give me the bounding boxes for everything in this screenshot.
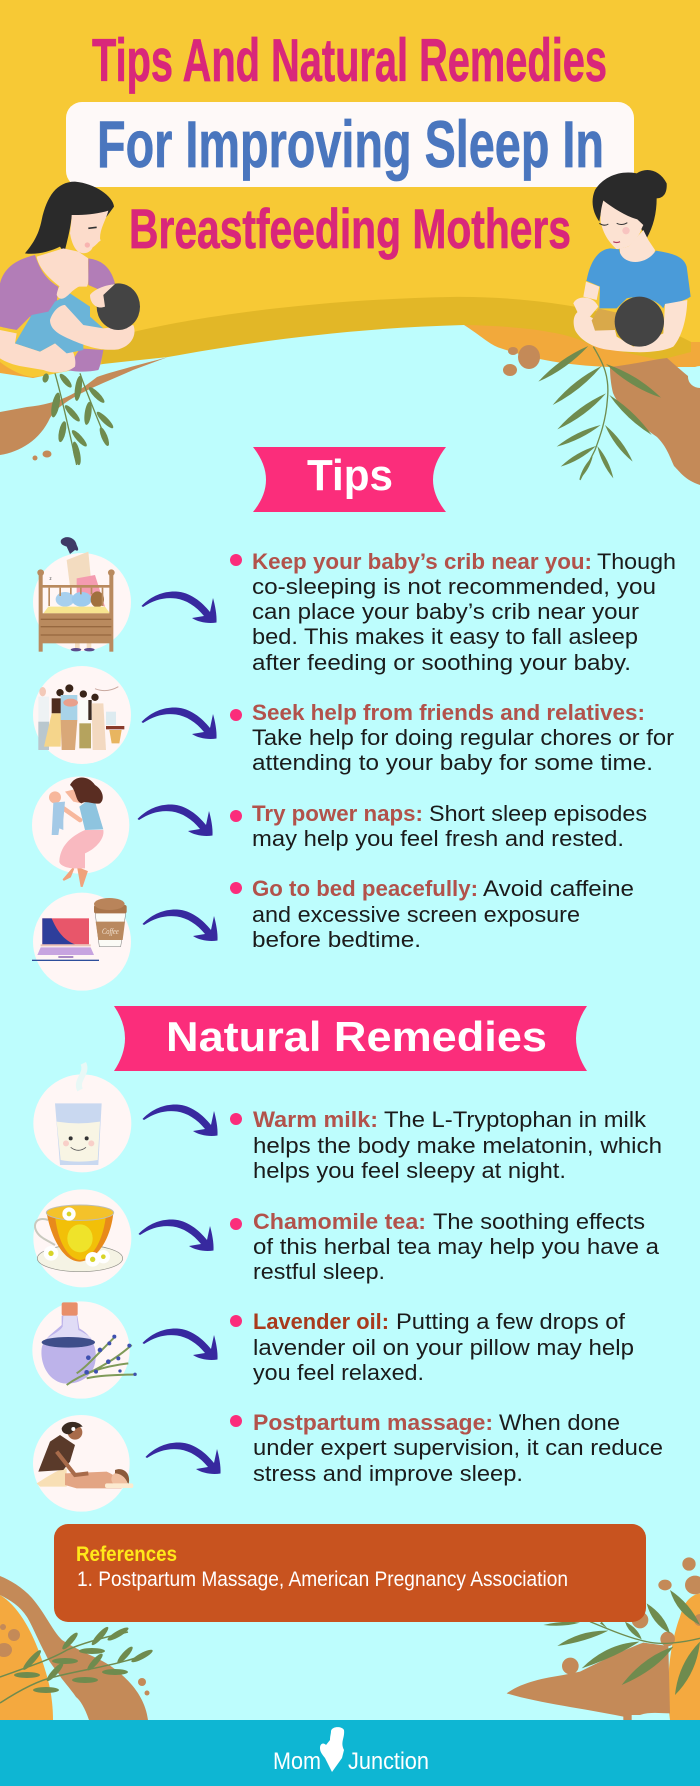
tip text: Though [597,549,676,574]
references panel [54,1524,646,1622]
remedy text: Postpartum massage: [253,1410,493,1435]
bullet [230,709,242,721]
decoration: bottom left foliage [0,1576,154,1720]
reference item: 1. Postpartum Massage, American Pregnancy Association [77,1568,568,1591]
icon: mother and crib [33,537,131,652]
tip text: may help you feel fresh and rested. [252,826,624,851]
banner: Natural Remedies [114,1006,587,1071]
remedy text: The L-Tryptophan in milk [384,1107,647,1132]
tip text: Try power naps: [252,801,423,826]
arrow [146,1442,221,1474]
tip text [252,801,647,851]
icon: cup of chamomile tea [33,1189,131,1287]
arrow [142,1328,218,1360]
tip text: before bedtime. [252,927,421,952]
decoration: right branch [503,345,700,485]
tip text: attending to your baby for some time. [252,750,653,775]
icon: glass of milk [33,1063,131,1172]
icon: laptop and coffee: Coffee [102,927,119,936]
remedy text: helps you feel sleepy at night. [253,1158,566,1183]
remedy text: restful sleep. [253,1259,385,1284]
title panel [66,102,634,187]
arrow [142,591,217,623]
remedy 1: warm milk [33,1063,662,1183]
bullet [230,554,242,566]
tip 4: go to bed [32,876,634,991]
references heading: References [76,1543,177,1566]
remedy text: The soothing effects [433,1209,645,1234]
logo: MomJunction [273,1727,429,1775]
illustration: mother breastfeeding left [0,182,140,466]
bullet [230,810,242,822]
remedy text: you feel relaxed. [253,1360,424,1385]
remedy text [253,1309,634,1385]
tip text [252,876,634,952]
logo: MomJunction: Mom [273,1748,321,1775]
tip text: Go to bed peacefully: [252,876,478,901]
arrow [142,1104,218,1136]
tip text: Short sleep episodes [429,801,647,826]
tip text [252,700,674,775]
banner: Tips: Tips [307,451,393,500]
bullet [230,1218,242,1230]
header background [0,0,700,470]
icon: mother and crib: z [49,576,52,581]
icon: friends and relatives [33,666,131,764]
bullet [230,1415,242,1427]
icon: laptop and coffee [32,893,131,991]
icon: lavender oil bottle [32,1301,137,1399]
tip text: Keep your baby’s crib near you: [252,549,592,574]
remedy text: lavender oil on your pillow may help [253,1335,634,1360]
remedy text: of this herbal tea may help you have a [253,1234,660,1259]
remedy text: Putting a few drops of [396,1309,626,1334]
arrow [142,707,217,739]
tip text: after feeding or soothing your baby. [252,650,631,675]
footer [0,1720,700,1786]
tip text: Take help for doing regular chores or for [252,725,674,750]
tip 1: crib [33,537,676,675]
remedy text: Chamomile tea: [253,1209,426,1234]
remedy text: Warm milk: [253,1107,378,1132]
decoration: bottom right foliage [507,1557,700,1720]
banner: Tips [253,447,446,512]
tip 2: family [33,666,674,775]
tip text: bed. This makes it easy to fall asleep [252,624,638,649]
remedy text: under expert supervision, it can reduce [253,1435,663,1460]
decoration: left branch [0,357,168,460]
tip text: Avoid caffeine [483,876,634,901]
bullet [230,882,242,894]
tip 3: power naps [32,776,647,887]
bullet [230,1113,242,1125]
remedy 4: postpartum massage [33,1410,663,1512]
bullet [230,1315,242,1327]
remedy text: Lavender oil: [253,1309,389,1334]
remedy text: helps the body make melatonin, which [253,1133,662,1158]
tip text: and excessive screen exposure [252,902,580,927]
icon: mother napping with baby [32,776,129,887]
remedy 2: chamomile tea [33,1189,660,1287]
arrow [138,1219,214,1251]
remedy text: When done [499,1410,620,1435]
remedy text: stress and improve sleep. [253,1461,523,1486]
tip text [252,549,676,675]
illustration: mother breastfeeding right [538,170,691,480]
arrow [142,909,218,941]
tip text: Seek help from friends and relatives: [252,700,645,725]
logo: MomJunction: Junction [348,1748,429,1775]
remedy 3: lavender oil [32,1301,634,1399]
tip text: co-sleeping is not recommended, you [252,574,656,599]
remedy text [253,1410,663,1486]
arrow [138,804,213,836]
remedy text [253,1209,660,1284]
icon: massage [33,1415,133,1512]
banner: Natural Remedies: Natural Remedies [166,1013,547,1060]
remedy text [253,1107,662,1183]
tip text: can place your baby’s crib near your [252,599,639,624]
